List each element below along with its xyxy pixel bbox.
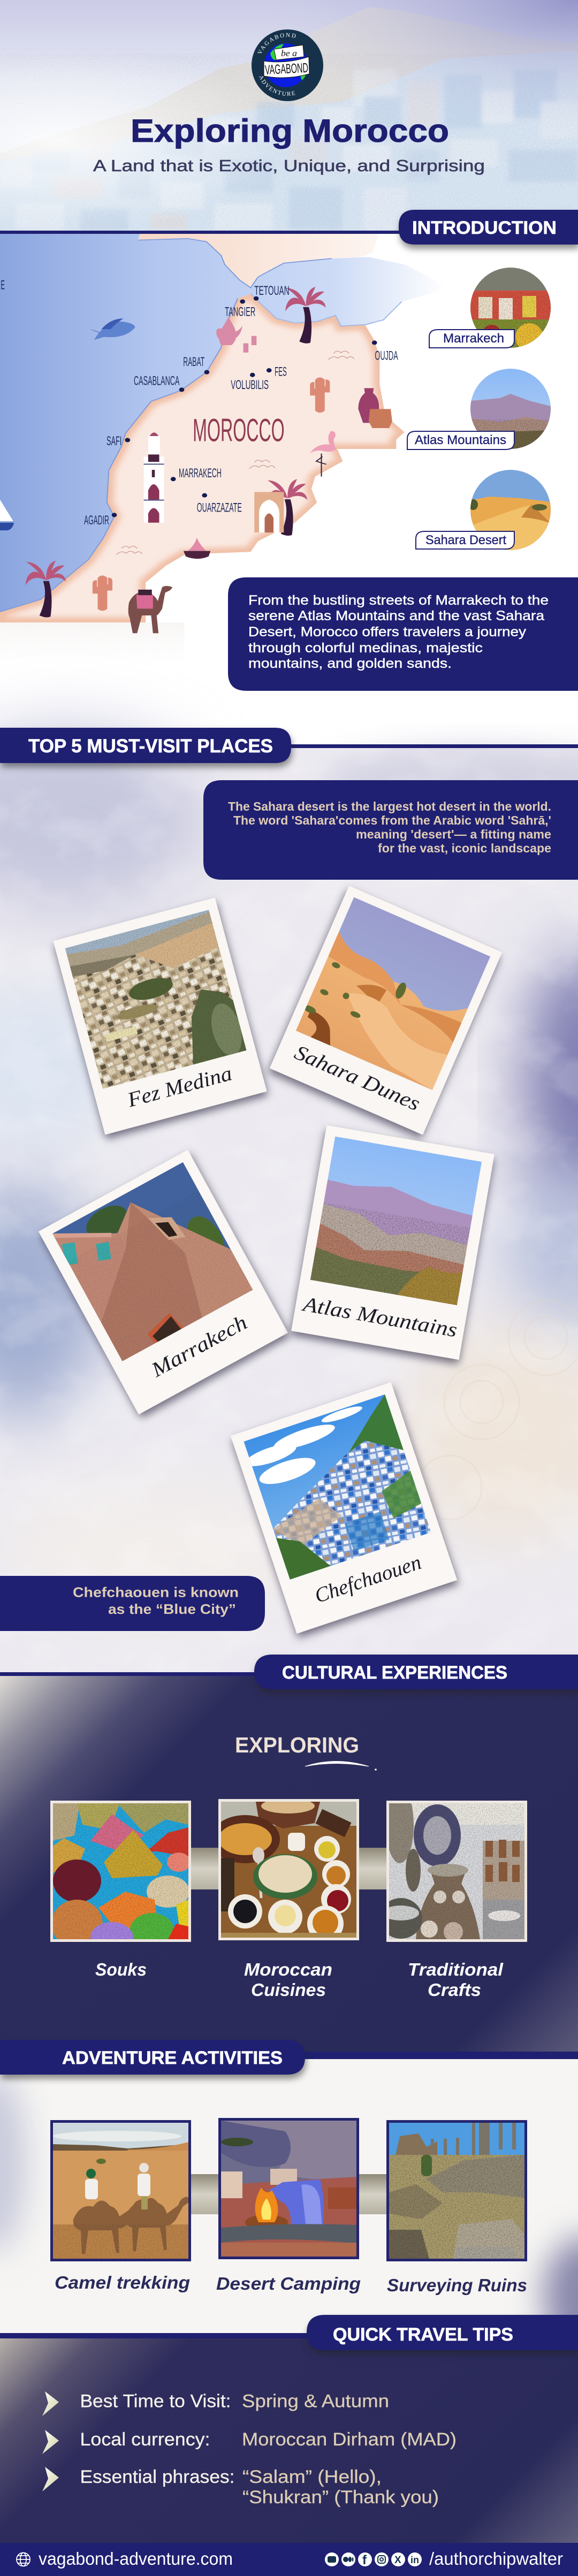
section header: Introduction: INTRODUCTION bbox=[412, 218, 557, 238]
callout: Sahara fact: meaning 'desert'— a fitting name bbox=[356, 827, 551, 841]
section header: Quick Travel Tips bbox=[0, 2315, 578, 2350]
map of Morocco: OUJDA bbox=[375, 348, 398, 363]
city labels: MARRAKECH bbox=[179, 466, 222, 480]
polaroid: Fez Medina bbox=[53, 897, 267, 1135]
icon: globe bbox=[17, 2552, 30, 2566]
polaroid: Marrakech: Marrakech bbox=[147, 1311, 251, 1382]
section header: Adventure Activities: ADVENTURE ACTIVITIES bbox=[62, 2048, 283, 2068]
callout: Sahara fact: for the vast, iconic landscape bbox=[378, 841, 551, 855]
tip: local currency bbox=[42, 2429, 457, 2454]
icons: social media bbox=[325, 2552, 422, 2567]
icon: arch gate bbox=[254, 492, 284, 532]
icon: pots bbox=[358, 388, 392, 428]
callout: Blue City: Chefchaouen is known bbox=[73, 1584, 239, 1600]
caption: Moroccan Cuisines bbox=[244, 1960, 332, 2000]
city labels: AGADIR bbox=[84, 513, 109, 528]
polaroid: Chefchaouen bbox=[231, 1382, 457, 1634]
section header: Adventure Activities bbox=[0, 2040, 578, 2075]
caption: Traditional Crafts: Traditional bbox=[408, 1960, 504, 1979]
label: Atlas Mountains: Atlas Mountains bbox=[415, 433, 506, 447]
section header: Top 5 Must-Visit Places bbox=[0, 728, 578, 763]
panel: top 5 places background bbox=[0, 728, 578, 1676]
logo: Vagabond Adventure badge: VAGABOND bbox=[257, 33, 296, 54]
caption: Traditional Crafts bbox=[408, 1960, 504, 2000]
tip: essential phrases: Essential phrases: bbox=[80, 2467, 234, 2487]
callout: Sahara fact bbox=[203, 780, 578, 880]
subtitle: A Land that is Exotic, Unique, and Surprising bbox=[93, 156, 485, 175]
caption: Traditional Crafts: Crafts bbox=[428, 1980, 481, 2000]
polaroid: Sahara Dunes bbox=[270, 886, 502, 1135]
icons: social media: X bbox=[394, 2555, 401, 2566]
tip: essential phrases: “Salam” (Hello), bbox=[242, 2467, 382, 2487]
tip: best time to visit: Spring & Autumn bbox=[242, 2391, 389, 2411]
footer bar bbox=[0, 2543, 578, 2576]
icon: teapot and cups bbox=[216, 317, 256, 353]
icon: palm trees bbox=[26, 287, 326, 618]
city labels: OUARZAZATE bbox=[197, 500, 242, 515]
icon: fish bbox=[89, 318, 135, 340]
tip: local currency: Moroccan Dirham (MAD) bbox=[242, 2429, 457, 2450]
city labels: FES bbox=[275, 364, 287, 379]
tip: essential phrases bbox=[42, 2467, 439, 2508]
photo circle: Marrakech bbox=[470, 268, 551, 351]
label: Marrakech: Marrakech bbox=[443, 331, 504, 346]
photo: Surveying Ruins bbox=[386, 2120, 527, 2261]
icons: social media: in bbox=[410, 2555, 419, 2565]
icon: camel bbox=[128, 586, 172, 633]
city labels: CASABLANCA bbox=[134, 374, 180, 388]
city labels: VOLUBILIS bbox=[231, 377, 269, 392]
heading: Exploring bbox=[235, 1733, 377, 1771]
polaroid: Chefchaouen: Chefchaouen bbox=[312, 1551, 424, 1607]
city labels: E bbox=[1, 278, 5, 292]
icons: social media: f bbox=[362, 2553, 367, 2567]
text panel: intro description bbox=[228, 577, 578, 691]
caption: Desert Camping: Desert Camping bbox=[216, 2274, 361, 2293]
label: Sahara Desert bbox=[416, 531, 514, 549]
tip: best time to visit bbox=[42, 2391, 389, 2416]
caption: Camel trekking: Camel trekking bbox=[55, 2273, 190, 2292]
tip: best time to visit: Best Time to Visit: bbox=[80, 2391, 231, 2411]
panel: adventure activities background bbox=[0, 2057, 578, 2354]
callout: Blue City bbox=[0, 1576, 265, 1631]
icon: flamingo bbox=[310, 431, 336, 477]
panel: introduction map bbox=[0, 233, 578, 731]
heading: Exploring: EXPLORING bbox=[235, 1733, 359, 1757]
photo circle: Sahara Desert bbox=[468, 470, 551, 550]
city labels: TANGIER bbox=[225, 304, 255, 319]
callout: Sahara fact: The word 'Sahara'comes from the Arabic word 'Sahrā,' bbox=[233, 813, 551, 827]
section header: Introduction bbox=[0, 210, 578, 245]
icon: minaret bbox=[144, 432, 164, 523]
text panel: intro description: serene Atlas Mountains and the vast Sahara bbox=[248, 608, 544, 623]
city labels: TETOUAN bbox=[254, 283, 290, 298]
label: Sahara Desert: Sahara Desert bbox=[425, 533, 506, 547]
callout: Sahara fact: The Sahara desert is the largest hot desert in the world. bbox=[228, 799, 551, 813]
section header: Cultural Experiences: CULTURAL EXPERIENCES bbox=[282, 1663, 507, 1683]
title: Exploring Morocco bbox=[131, 113, 449, 149]
section header: Top 5 Must-Visit Places: TOP 5 MUST-VISIT PLACES bbox=[28, 736, 273, 757]
icon: boat bbox=[0, 500, 14, 530]
photo: Desert Camping bbox=[218, 2118, 359, 2259]
connectors between culture photos bbox=[191, 1848, 386, 1889]
polaroid: Atlas Mountains bbox=[291, 1125, 495, 1360]
tip: essential phrases: “Shukran” (Thank you) bbox=[242, 2487, 439, 2508]
text panel: intro description: through colorful medinas, majestic bbox=[248, 641, 483, 656]
text panel: intro description: From the bustling streets of Marrakech to the bbox=[248, 593, 549, 608]
logo: Vagabond Adventure badge: VAGABOND bbox=[264, 60, 309, 78]
city labels: RABAT bbox=[183, 354, 204, 369]
map of Morocco bbox=[0, 234, 428, 634]
caption: Moroccan Cuisines: Cuisines bbox=[251, 1980, 326, 2000]
map of Morocco: MOROCCO bbox=[193, 413, 285, 448]
social handle: /authorchipwalter bbox=[429, 2549, 563, 2569]
city labels: SAFI bbox=[107, 433, 121, 448]
city labels bbox=[1, 278, 398, 528]
section header: Quick Travel Tips: QUICK TRAVEL TIPS bbox=[333, 2325, 513, 2345]
polaroid: Marrakech bbox=[39, 1150, 288, 1414]
text panel: intro description: Desert, Morocco offers travelers a journey bbox=[248, 624, 527, 639]
website: vagabond-adventure.com bbox=[39, 2549, 233, 2569]
connectors between adventure photos bbox=[191, 2174, 386, 2214]
icon: birds bbox=[117, 351, 354, 554]
logo: Vagabond Adventure badge bbox=[252, 29, 323, 101]
polaroid: Fez Medina: Fez Medina bbox=[125, 1062, 234, 1112]
panel: quick travel tips background bbox=[0, 2337, 578, 2543]
text panel: intro description: mountains, and golden sands. bbox=[248, 656, 452, 671]
icon: cactus bbox=[93, 378, 330, 611]
tip: local currency: Local currency: bbox=[80, 2429, 210, 2450]
label: Marrakech bbox=[429, 330, 514, 348]
panel: cultural experiences background bbox=[0, 1675, 578, 2057]
polaroid: Atlas Mountains: Atlas Mountains bbox=[300, 1292, 459, 1342]
callout: Blue City: as the “Blue City” bbox=[108, 1601, 236, 1617]
polaroid: Sahara Dunes: Sahara Dunes bbox=[291, 1041, 423, 1115]
section header: Cultural Experiences bbox=[0, 1655, 578, 1689]
photo: Moroccan Cuisines bbox=[210, 1798, 359, 1942]
photo: Souks bbox=[50, 1801, 191, 1952]
photo: Camel trekking bbox=[50, 2120, 191, 2261]
photo circle: Atlas Mountains bbox=[470, 369, 551, 449]
label: Atlas Mountains bbox=[407, 431, 514, 449]
logo: Vagabond Adventure badge: ADVENTURE bbox=[259, 76, 295, 96]
caption: Moroccan Cuisines: Moroccan bbox=[244, 1960, 332, 1979]
photo: Traditional Crafts bbox=[379, 1786, 527, 1942]
city markers bbox=[112, 296, 377, 517]
hero background: Chefchaouen town wash bbox=[0, 0, 578, 233]
caption: Souks: Souks bbox=[95, 1960, 147, 1979]
caption: Surveying Ruins: Surveying Ruins bbox=[387, 2275, 527, 2295]
icon: tagine bbox=[184, 537, 210, 559]
logo: Vagabond Adventure badge: be a bbox=[281, 48, 297, 58]
